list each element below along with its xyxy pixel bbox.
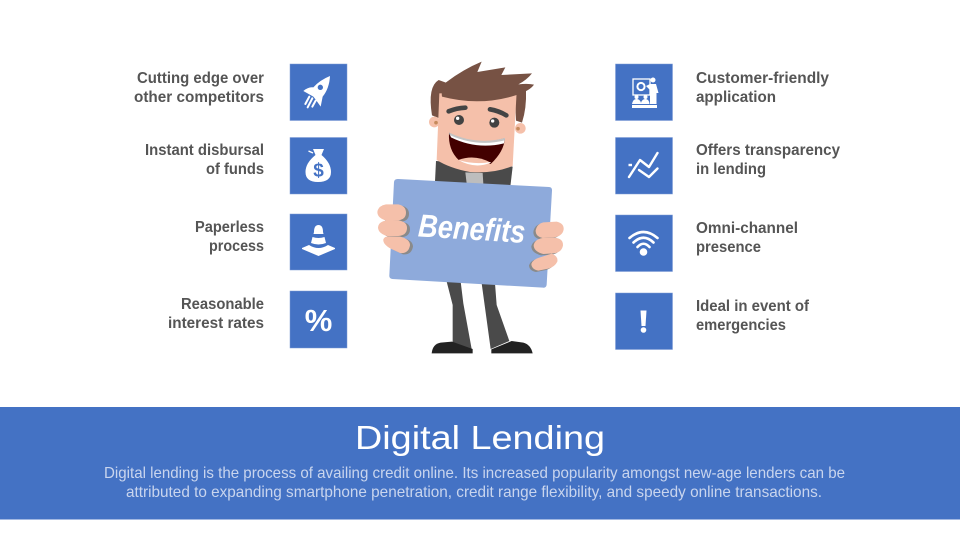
benefit: paperless [195, 214, 347, 270]
text: paperless: process [209, 238, 264, 255]
text: instant disbursal: Instant disbursal [145, 142, 264, 159]
text: cutting edge [134, 70, 264, 106]
text: transparency [696, 142, 840, 178]
benefit: interest rates [168, 291, 347, 348]
benefit: omni-channel [616, 215, 798, 272]
text: emergencies [696, 298, 810, 334]
banner description: attributed to expanding smartphone penetration, credit range flexibility, and speedy online transactions. [126, 484, 822, 501]
text: cutting edge: Cutting edge over [137, 70, 264, 87]
text: customer-friendly [696, 70, 829, 106]
text: omni-channel [696, 220, 798, 256]
icon tile: money bag: $ [313, 160, 324, 182]
text: emergencies: emergencies [696, 317, 786, 334]
sign board [389, 179, 552, 288]
sign label: Benefits [417, 207, 527, 250]
hands [377, 204, 564, 272]
icon tile: exclamation [616, 293, 672, 350]
icon tile: percent: % [305, 303, 332, 338]
panel: right benefits [616, 64, 840, 350]
text: interest rates: interest rates [168, 315, 264, 332]
character holding benefits sign [377, 62, 564, 353]
benefit: instant disbursal [145, 138, 347, 194]
text: transparency: in lending [696, 161, 766, 178]
icon tile: money bag [290, 138, 347, 194]
benefit: emergencies [616, 293, 810, 350]
benefit: customer-friendly [616, 64, 829, 120]
text: interest rates [168, 296, 264, 332]
text: instant disbursal: of funds [206, 161, 264, 178]
footer banner [0, 407, 960, 520]
icon tile: line chart [616, 138, 672, 194]
text: customer-friendly: application [696, 89, 776, 106]
legs and shoes [432, 282, 533, 353]
banner description: Digital lending is the process of availing credit online. Its increased popularity amongst new-age lenders can be [104, 465, 845, 482]
text: omni-channel: Omni-channel [696, 220, 798, 237]
benefit: transparency [616, 138, 840, 194]
text: omni-channel: presence [696, 239, 761, 256]
icon tile: traffic cone [290, 214, 347, 270]
text: cutting edge: other competitors [134, 89, 264, 106]
text: instant disbursal [145, 142, 264, 178]
benefit: cutting edge [134, 64, 347, 120]
icon tile: wifi [616, 215, 672, 272]
text: customer-friendly: Customer-friendly [696, 70, 829, 87]
text: interest rates: Reasonable [181, 296, 264, 313]
icon tile: percent [290, 291, 347, 348]
text: paperless: Paperless [195, 219, 264, 236]
text: emergencies: Ideal in event of [696, 298, 810, 315]
panel: left benefits [134, 64, 347, 348]
head and collar [429, 62, 534, 187]
text: transparency: Offers transparency [696, 142, 840, 159]
text: paperless [195, 219, 264, 255]
banner title: Digital Lending [355, 419, 605, 456]
icon tile: presenter [616, 64, 672, 120]
banner description [104, 465, 845, 501]
icon tile: rocket [290, 64, 347, 120]
